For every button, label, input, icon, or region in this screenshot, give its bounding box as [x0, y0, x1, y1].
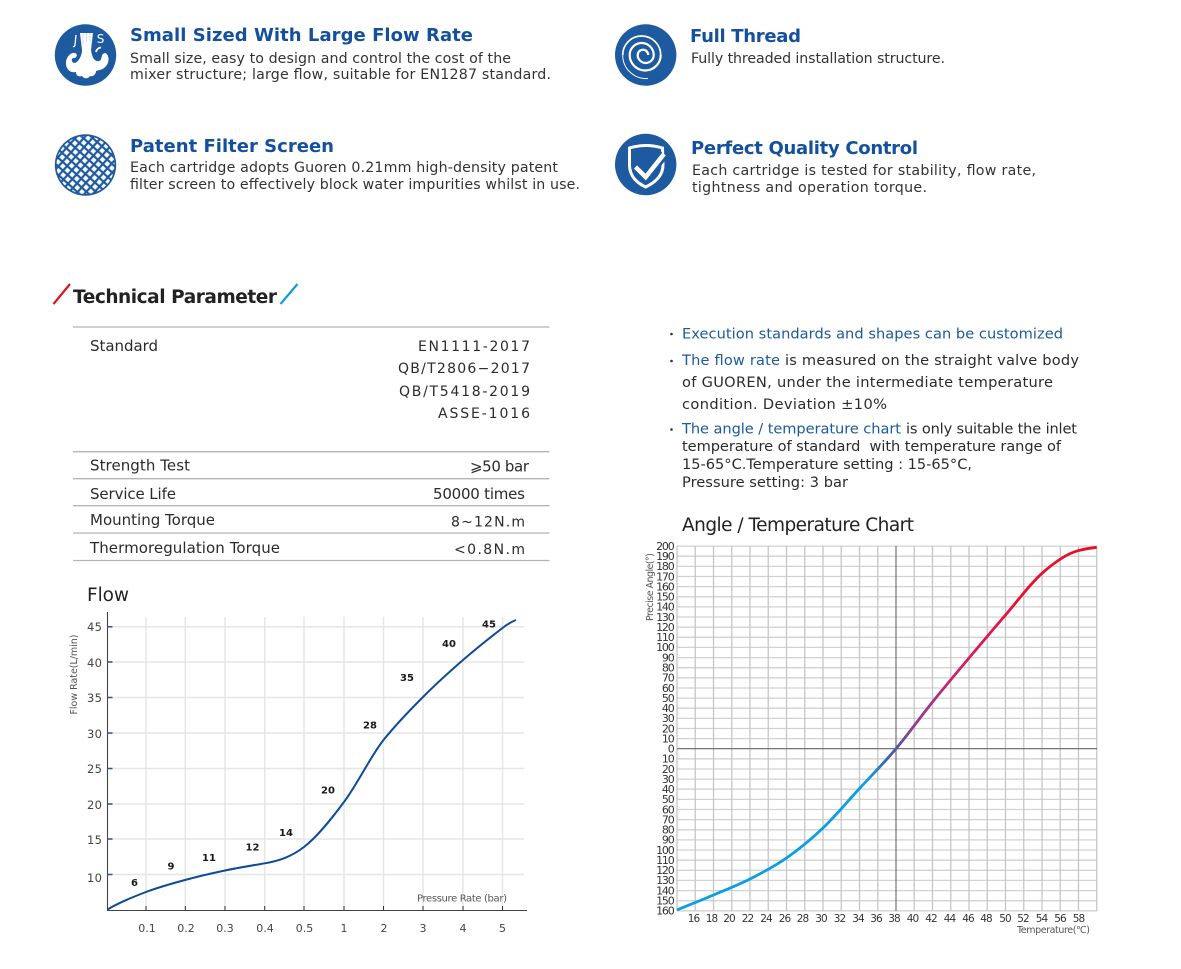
- y axis labels: 0: [668, 742, 675, 756]
- data labels: [131, 620, 496, 889]
- y axis title: Precise Angle(°): [645, 553, 656, 621]
- y axis labels: 150: [656, 894, 675, 908]
- x axis labels: 46: [962, 913, 975, 925]
- note: angle temperature chart: temperature of standard with temperature range of: [682, 438, 1062, 455]
- row: standard: QB/T5418-2019: [399, 384, 530, 400]
- y axis labels: 20: [662, 722, 675, 735]
- description: Each cartridge is tested for stability, flow rate,: [692, 163, 1036, 179]
- y axis labels: 70: [662, 672, 675, 685]
- y axis labels: 10: [662, 732, 675, 745]
- y axis labels: 70: [662, 813, 675, 826]
- section heading: technical parameter: Technical Parameter: [73, 287, 278, 308]
- x axis labels: 26: [779, 913, 791, 925]
- y axis labels: 50: [662, 793, 675, 806]
- y axis labels: 60: [662, 682, 675, 695]
- x axis labels: 0.5: [296, 922, 313, 935]
- row: standard: QB/T2806−2017: [398, 361, 530, 377]
- x axis labels: 1: [340, 922, 348, 935]
- icon: water fountain: S: [97, 32, 104, 46]
- description: [692, 163, 1036, 196]
- note: angle temperature chart: Pressure setting: 3 bar: [682, 474, 848, 491]
- y axis labels: 200: [656, 540, 675, 553]
- y axis labels: 120: [656, 864, 675, 877]
- row: strength test: [90, 456, 530, 476]
- y axis labels: 130: [656, 611, 675, 624]
- note: flow rate: The flow rate: [681, 352, 780, 369]
- y axis labels: 100: [656, 641, 675, 654]
- y axis labels: 25: [87, 762, 102, 776]
- x axis labels: 0.4: [256, 922, 274, 935]
- y axis labels: [656, 540, 675, 918]
- heading: Patent Filter Screen: [130, 136, 334, 157]
- row: standard: Standard: [90, 337, 158, 355]
- data labels: 40: [442, 639, 456, 650]
- flow curve: [108, 620, 516, 910]
- row: thermoregulation torque: [89, 539, 525, 558]
- data labels: 12: [246, 842, 259, 854]
- heading: Full Thread: [690, 26, 801, 47]
- y axis title: Flow Rate(L/min): [69, 634, 80, 714]
- x axis labels: 0.3: [216, 922, 234, 935]
- description: [130, 51, 551, 83]
- row: mounting torque: 8~12N.m: [451, 514, 525, 530]
- x axis labels: 54: [1036, 913, 1048, 925]
- y axis labels: 15: [87, 833, 102, 847]
- x axis labels: 44: [944, 913, 956, 925]
- row: service life: Service Life: [90, 485, 176, 503]
- chart title: Flow: [87, 585, 129, 606]
- x axis labels: 0.1: [138, 922, 156, 935]
- row: mounting torque: Mounting Torque: [90, 511, 215, 529]
- description: Each cartridge adopts Guoren 0.21mm high-density patent: [130, 160, 558, 176]
- angle temperature chart: [645, 515, 1097, 936]
- feature: small sized with large flow rate: [55, 24, 551, 86]
- x axis labels: 18: [706, 913, 717, 925]
- y axis labels: 110: [656, 854, 675, 867]
- x axis labels: 32: [834, 913, 845, 925]
- icon: spiral thread: [615, 24, 676, 86]
- y axis labels: 80: [662, 662, 675, 674]
- x axis labels: 22: [742, 913, 753, 925]
- y axis labels: 100: [656, 844, 675, 857]
- y axis labels: 110: [656, 631, 675, 644]
- x axis labels: 2: [380, 922, 388, 935]
- y axis labels: 35: [87, 691, 102, 705]
- y axis labels: 50: [662, 692, 675, 705]
- y axis labels: 160: [656, 580, 675, 593]
- data labels: 14: [279, 828, 293, 839]
- y axis labels: 90: [662, 651, 675, 664]
- x axis labels: 16: [688, 913, 700, 925]
- y axis labels: 45: [87, 620, 102, 634]
- description: filter screen to effectively block water impurities whilst in use.: [130, 177, 580, 193]
- data labels: 20: [321, 786, 335, 796]
- y axis labels: 130: [656, 874, 675, 887]
- description: [130, 160, 580, 193]
- x axis labels: 56: [1054, 913, 1067, 925]
- y axis labels: 40: [662, 783, 675, 796]
- heading: Small Sized With Large Flow Rate: [130, 25, 473, 46]
- note: angle temperature chart: The angle / temperature chart: [681, 420, 901, 438]
- y axis labels: 30: [662, 712, 675, 725]
- y axis labels: 170: [656, 570, 675, 583]
- row: service life: [90, 485, 525, 503]
- x axis labels: 58: [1073, 913, 1084, 925]
- note: angle temperature chart: is only suitable the inlet: [906, 420, 1077, 438]
- note: angle temperature chart: 15-65°C.Temperature setting : 15-65°C,: [682, 456, 972, 473]
- heading: Perfect Quality Control: [691, 138, 918, 159]
- x axis labels: 34: [852, 913, 865, 925]
- icon: water fountain: [55, 24, 116, 86]
- data labels: 45: [482, 620, 496, 630]
- y axis labels: 30: [87, 727, 102, 741]
- y axis labels: 60: [662, 803, 675, 816]
- flow chart: [69, 585, 527, 935]
- data labels: 9: [168, 862, 175, 872]
- y axis labels: 20: [662, 763, 675, 776]
- row: strength test: Strength Test: [90, 456, 190, 474]
- data labels: 11: [202, 853, 216, 864]
- y axis labels: 10: [87, 871, 102, 885]
- y axis labels: 150: [656, 591, 675, 604]
- x axis labels: 50: [999, 913, 1011, 925]
- note: flow rate: condition. Deviation ±10%: [682, 396, 887, 413]
- note: execution standards: Execution standards and shapes can be customized: [682, 326, 1063, 342]
- x axis title: Temperature(℃): [1016, 925, 1090, 936]
- y axis labels: 90: [662, 834, 675, 847]
- y axis labels: 80: [662, 824, 675, 837]
- row: thermoregulation torque: <0.8N.m: [454, 542, 525, 558]
- row: thermoregulation torque: Thermoregulation Torque: [89, 539, 280, 557]
- y axis labels: 190: [656, 550, 675, 563]
- x axis labels: 24: [760, 913, 773, 925]
- x axis labels: 38: [888, 913, 900, 925]
- note: flow rate: is measured on the straight valve body: [785, 352, 1079, 369]
- zero axes: [677, 546, 1097, 911]
- x axis labels: 48: [980, 913, 992, 925]
- icon: shield with check: [615, 134, 676, 195]
- description: mixer structure; large flow, suitable for EN1287 standard.: [130, 67, 551, 83]
- x axis labels: 36: [870, 913, 883, 925]
- y axis labels: [87, 620, 102, 885]
- row: service life: 50000 times: [433, 485, 525, 503]
- row: standard: EN1111-2017: [418, 339, 530, 355]
- x axis labels: 28: [797, 913, 808, 925]
- y axis labels: 10: [662, 753, 675, 766]
- y axis labels: 140: [656, 884, 675, 897]
- x axis labels: 5: [499, 922, 506, 935]
- x axis labels: [138, 922, 506, 935]
- x axis title: Pressure Rate (bar): [417, 894, 507, 904]
- x axis labels: [688, 913, 1084, 925]
- note: flow rate: [670, 352, 1079, 413]
- y axis labels: 40: [662, 702, 675, 715]
- x axis labels: 3: [420, 922, 426, 935]
- note: angle temperature chart: [670, 420, 1077, 491]
- x axis labels: 20: [723, 913, 735, 925]
- feature: patent filter screen: [55, 134, 580, 196]
- x axis labels: 0.2: [177, 922, 195, 935]
- axes: [108, 612, 527, 910]
- y axis labels: 40: [87, 656, 102, 670]
- x axis labels: 30: [815, 913, 827, 925]
- data labels: 6: [131, 878, 138, 889]
- description: Fully threaded installation structure.: [691, 51, 945, 67]
- description: tightness and operation torque.: [692, 180, 927, 196]
- data labels: 35: [400, 673, 414, 684]
- feature: perfect quality control: [615, 134, 1036, 196]
- data labels: 28: [363, 720, 377, 732]
- row: standard: ASSE-1016: [438, 406, 530, 422]
- chart title: Angle / Temperature Chart: [682, 515, 914, 536]
- y axis labels: 140: [656, 601, 675, 614]
- x axis labels: 52: [1017, 913, 1029, 925]
- row: mounting torque: [90, 511, 525, 530]
- note: flow rate: of GUOREN, under the intermediate temperature: [682, 374, 1053, 391]
- feature: full thread: [615, 24, 945, 86]
- y axis labels: 180: [656, 560, 675, 573]
- row: strength test: ⩾50 bar: [470, 458, 530, 476]
- y axis labels: 20: [87, 798, 102, 812]
- y axis labels: 160: [656, 905, 675, 918]
- technical parameter table: [73, 327, 550, 560]
- x axis labels: 42: [925, 913, 937, 925]
- x axis labels: 4: [460, 922, 466, 935]
- notes list: [670, 326, 1079, 491]
- temperature curve: [677, 547, 1097, 910]
- icon: filter mesh: [55, 134, 116, 196]
- y axis labels: 120: [656, 621, 675, 634]
- x axis labels: 40: [907, 913, 918, 925]
- description: Small size, easy to design and control the cost of the: [130, 51, 511, 67]
- y axis labels: 30: [662, 773, 675, 786]
- row: standard: [90, 337, 530, 422]
